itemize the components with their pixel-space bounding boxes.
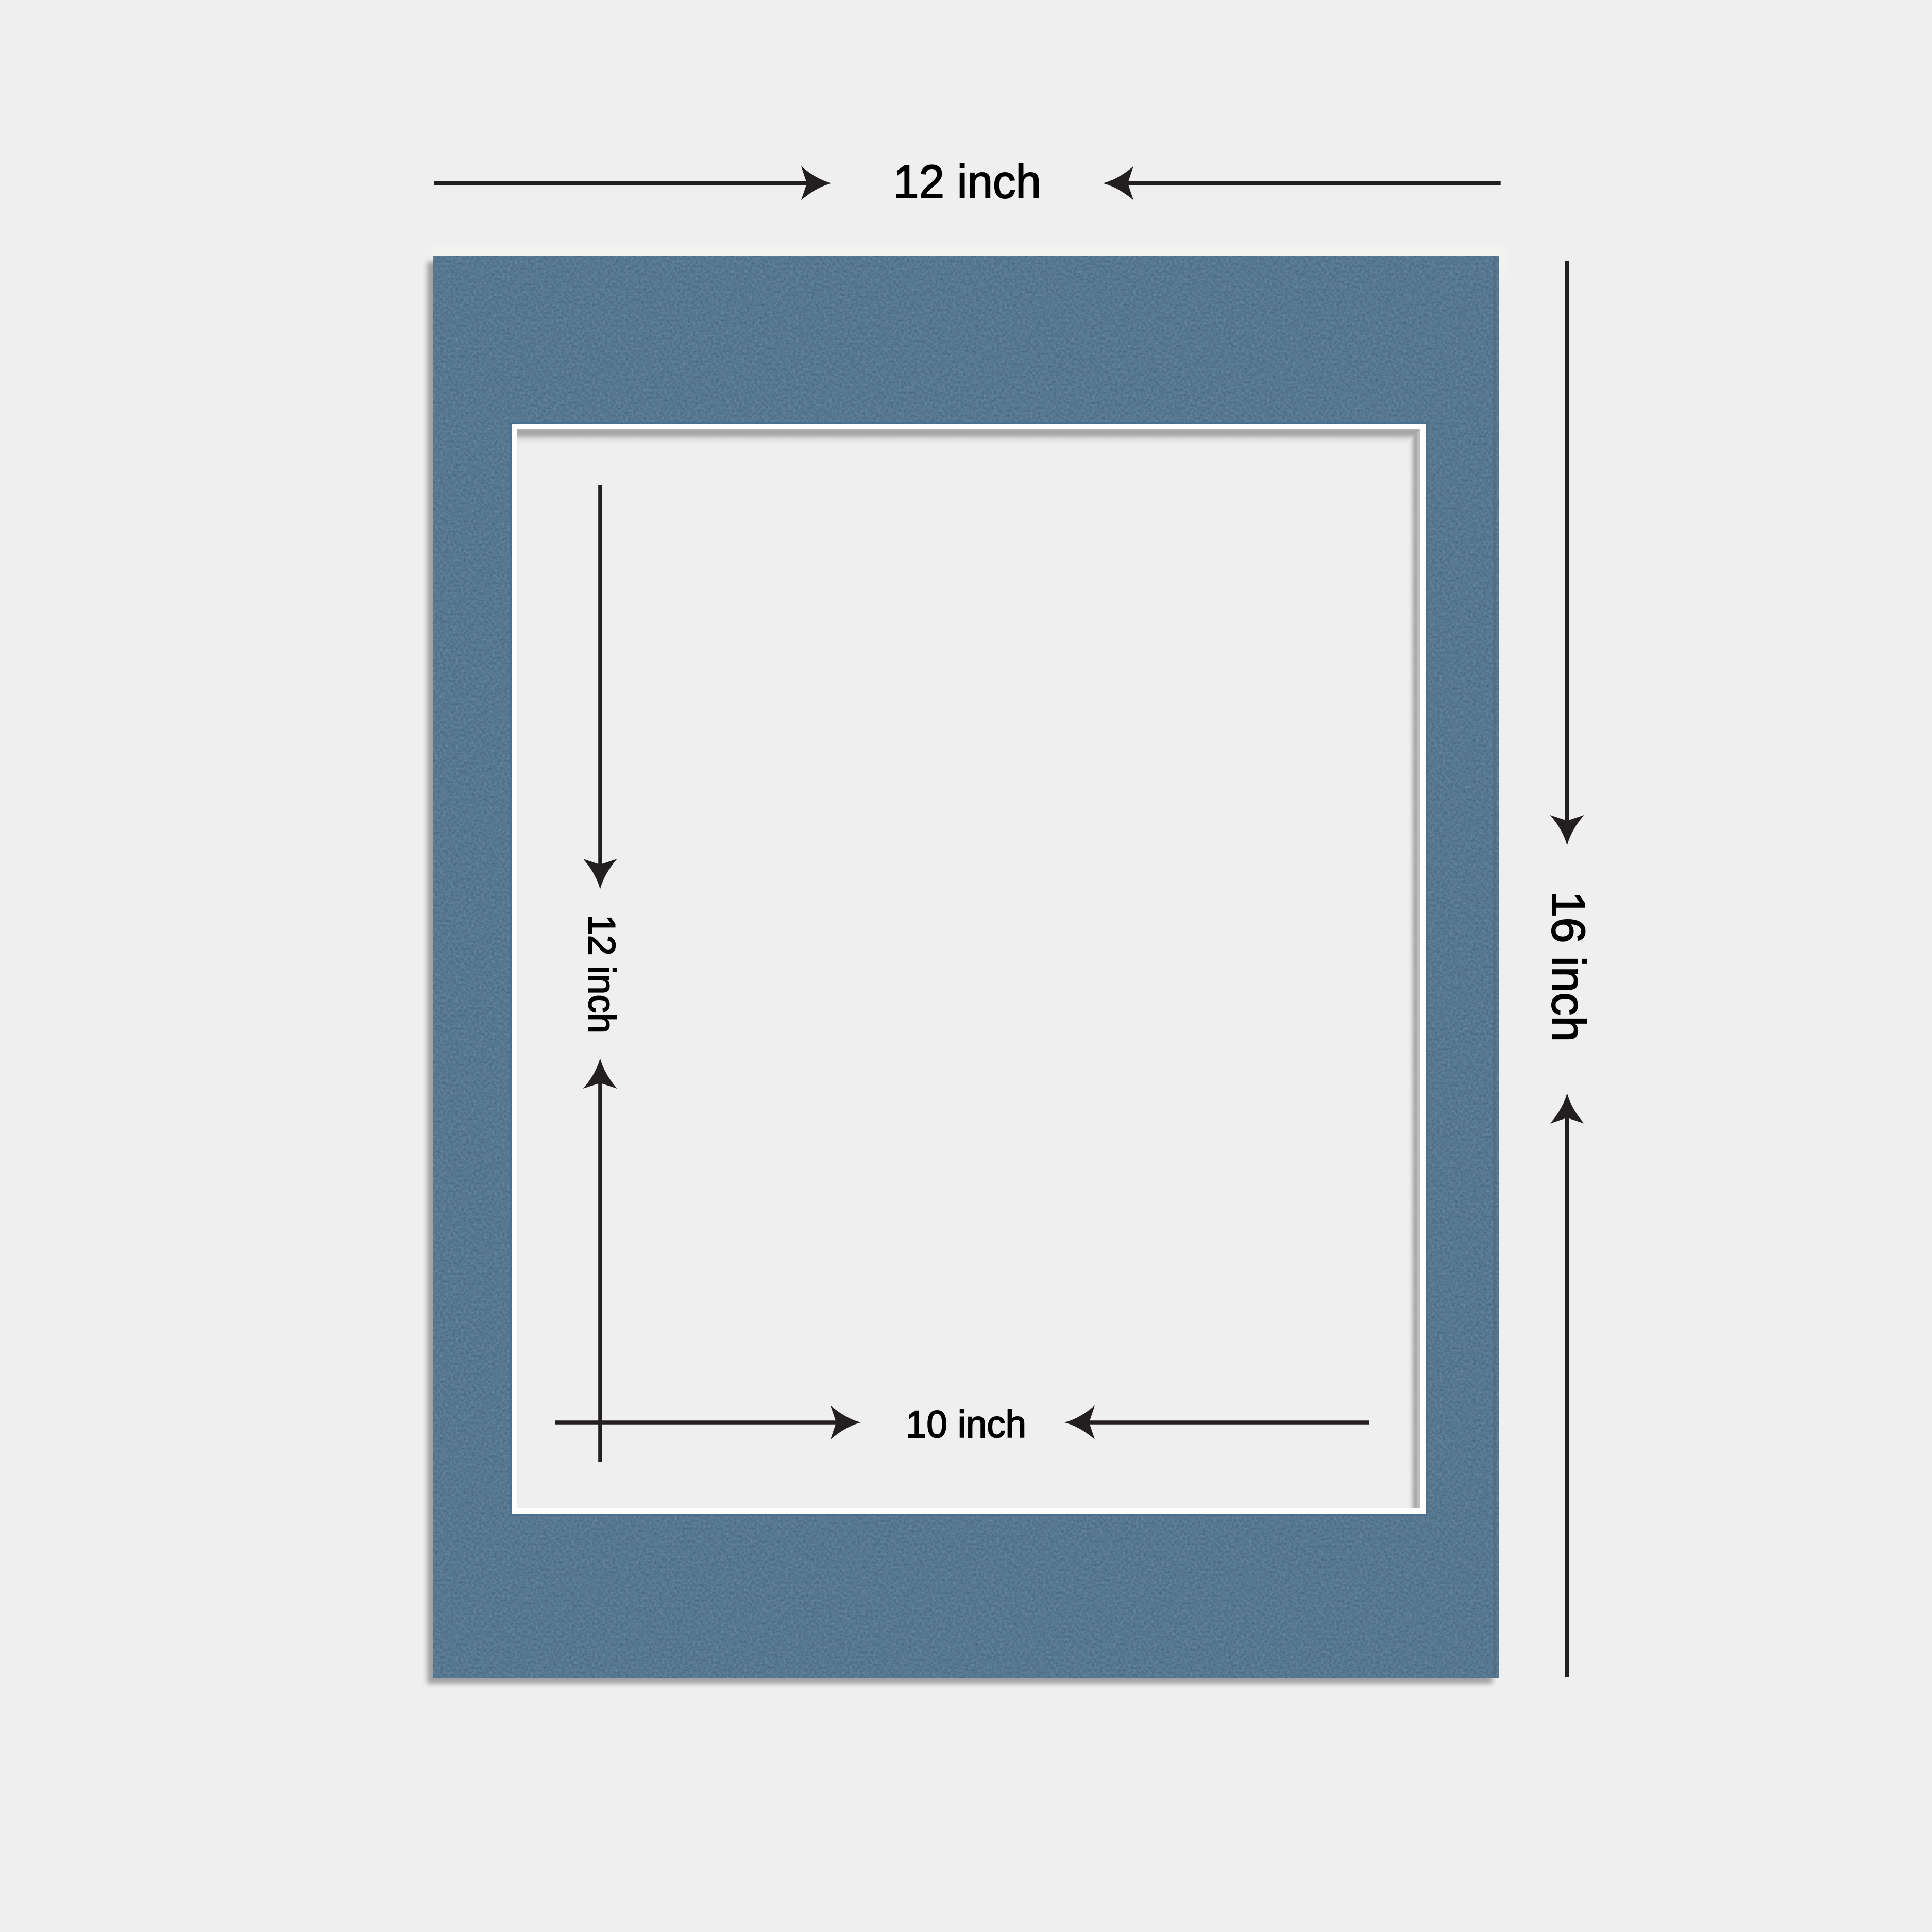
arrow: board width, left <box>434 166 832 200</box>
arrow: board width, right <box>1103 166 1501 200</box>
board surface <box>433 256 1499 1678</box>
window cut edge <box>510 422 1428 1516</box>
arrow: window width, left <box>555 1405 861 1439</box>
arrow: window width, right <box>1064 1405 1369 1439</box>
label: 12 inch window height: 12 inch <box>581 914 622 1033</box>
arrow: window height, top <box>583 485 617 889</box>
board paper texture <box>433 256 1499 1678</box>
panel: mat board <box>427 246 1504 1684</box>
window opening <box>517 429 1420 1508</box>
label: 10 inch window width: 10 inch <box>906 1403 1026 1446</box>
window right inner shadow <box>1409 429 1420 1508</box>
arrow: window height, bottom <box>583 1058 617 1462</box>
board drop shadow <box>427 262 1493 1684</box>
label: 16 inch board height: 16 inch <box>1542 891 1594 1042</box>
board right edge crease <box>1493 256 1496 1678</box>
label: 12 inch board width: 12 inch <box>893 156 1041 208</box>
arrow: board height, top <box>1550 261 1584 845</box>
window white bevel <box>512 424 1426 1514</box>
arrow: board height, bottom <box>1550 1093 1584 1677</box>
board highlight halo <box>433 246 1504 277</box>
window top inner shadow <box>517 429 1420 445</box>
